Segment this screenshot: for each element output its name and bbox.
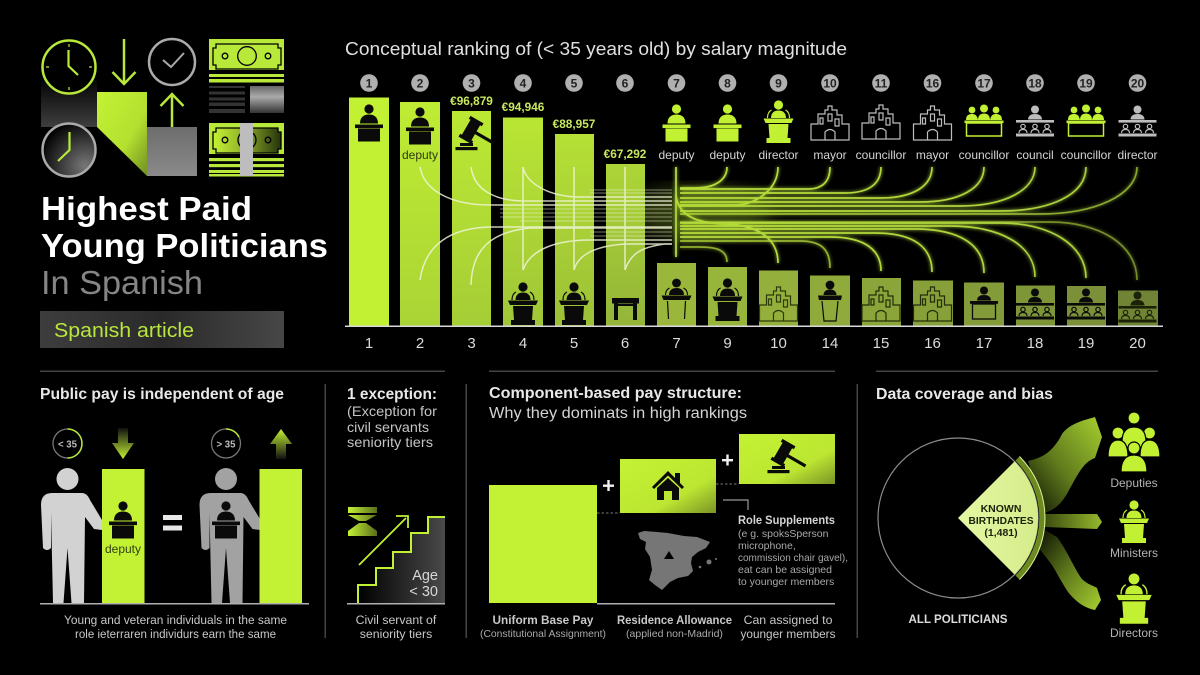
icon: council 20 <box>1118 106 1156 136</box>
known birthdates wedge: BIRTHDATES <box>968 515 1034 527</box>
icon: council 19 <box>1067 288 1105 320</box>
captions: Can assigned to <box>744 613 833 627</box>
icon: desk 17 <box>970 286 998 319</box>
grey block <box>147 127 197 176</box>
axis numbers: 20 <box>1129 335 1146 352</box>
axis numbers: 6 <box>621 335 629 352</box>
title: Young Politicians <box>41 227 328 264</box>
rank badges: 4 <box>520 76 527 90</box>
equals sign <box>163 515 182 530</box>
icon: hourglass <box>348 507 377 536</box>
heading <box>489 385 747 422</box>
panel: component-based pay structure <box>480 385 848 641</box>
captions: Uniform Base Pay <box>493 613 594 627</box>
rank badges: 16 <box>926 76 939 90</box>
captions: (Constitutional Assignment) <box>480 628 606 640</box>
text lines block <box>209 86 245 113</box>
icon: arrow down <box>112 39 136 84</box>
icon: map of Spain <box>638 531 717 590</box>
icon: council 18 <box>1016 106 1054 136</box>
pay bar veteran <box>260 469 302 603</box>
axis numbers: 7 <box>672 335 681 352</box>
title: Highest Paid <box>41 190 252 227</box>
rank badges: 1 <box>366 76 373 90</box>
caption: role ieterraren individurs earn the same <box>75 627 276 641</box>
heading: 1 exception: <box>347 386 437 403</box>
caption <box>356 613 437 641</box>
role labels: councillor <box>1061 148 1111 162</box>
known birthdates wedge <box>958 456 1045 580</box>
icon: ministers lectern <box>1119 500 1149 543</box>
person veteran <box>200 468 260 603</box>
icon: podium on veteran <box>212 501 240 538</box>
icon: lectern 14 <box>818 281 842 321</box>
axis numbers <box>365 335 1146 352</box>
pay bar young <box>102 469 144 603</box>
grey photo block <box>250 86 284 113</box>
icon: gavel on bar 3 <box>456 116 500 153</box>
role supplements text: (e g. spoksSperson <box>738 528 829 540</box>
icon: podium dark on bar 2 <box>406 107 434 144</box>
title: In Spanish <box>41 264 203 301</box>
caption <box>64 613 287 641</box>
salary values: €94,946 <box>502 100 545 114</box>
axis numbers: 15 <box>873 335 889 352</box>
icon: city 16 <box>914 287 952 321</box>
axis numbers: 10 <box>770 335 787 352</box>
rank badges: 11 <box>875 76 888 90</box>
role labels: councillor <box>856 148 906 162</box>
role labels: deputy <box>709 148 746 162</box>
description: (Exception for <box>347 404 437 419</box>
title <box>41 190 328 301</box>
icon: city 11 <box>862 105 900 139</box>
axis numbers: 18 <box>1027 335 1043 352</box>
under 35 badge <box>53 429 82 458</box>
captions: (applied non-Madrid) <box>626 628 723 640</box>
icon: podium dark on bar 1 <box>355 104 383 142</box>
axis numbers: 5 <box>570 335 578 352</box>
heading: Component-based pay structure: <box>489 385 742 402</box>
supplements block <box>739 434 835 484</box>
rank badges: 7 <box>673 76 680 90</box>
rank badges: 19 <box>1079 76 1093 90</box>
axis numbers: 14 <box>822 335 838 352</box>
under 35 badge: < 35 <box>58 438 77 450</box>
rank badges: 2 <box>417 76 424 90</box>
icon: arrow up <box>160 94 184 127</box>
header icon cluster <box>41 39 284 176</box>
icon: council 18 <box>1016 288 1054 320</box>
description: civil servants <box>347 420 429 435</box>
salary values <box>450 94 647 161</box>
icon: desk group 19 <box>1066 104 1106 136</box>
all politicians circle <box>878 438 1038 598</box>
role labels <box>402 148 1158 162</box>
known birthdates wedge: KNOWN <box>981 503 1021 515</box>
role labels: council <box>1016 148 1054 162</box>
known birthdates wedge: (1,481) <box>984 527 1018 539</box>
rank badges: 5 <box>571 76 578 90</box>
axis numbers: 17 <box>976 335 992 352</box>
icon: city 10 <box>760 287 798 321</box>
icon: directors lectern <box>1116 573 1152 624</box>
icon: city 16 <box>914 106 952 140</box>
label: directors: Directors <box>1110 626 1158 640</box>
axis numbers: 3 <box>467 335 476 352</box>
icon: lectern 5 <box>559 282 589 325</box>
rank badges: 6 <box>622 76 629 90</box>
icon: lectern outline 7 <box>662 279 692 319</box>
role icons above bars <box>355 100 1156 153</box>
salary values: €67,292 <box>604 147 647 161</box>
base pay block <box>489 485 597 603</box>
rank badges <box>360 74 1146 92</box>
panel: data coverage and bias <box>876 386 1160 640</box>
axis numbers: 16 <box>924 335 941 352</box>
role labels: director <box>1117 148 1158 162</box>
residence block <box>620 459 716 513</box>
icon: green podium 8 <box>714 104 742 142</box>
role supplements text: to younger members <box>738 576 834 588</box>
icon: check circle <box>149 39 195 85</box>
icon: council 20 <box>1118 292 1156 322</box>
panel: one exception <box>347 386 445 641</box>
bar label: deputy <box>105 542 141 556</box>
stairs chart: Age <box>412 568 438 584</box>
flow to deputies <box>1028 417 1102 513</box>
icon: green lectern 9 <box>764 100 794 143</box>
axis numbers: 9 <box>723 335 732 352</box>
flow to directors <box>1038 529 1101 610</box>
captions: Residence Allowance <box>617 613 732 627</box>
role labels: deputy <box>402 148 438 162</box>
icon: desk group 17 <box>964 104 1004 136</box>
stairs chart: < 30 <box>409 584 438 600</box>
panel: public pay is independent of age <box>40 386 302 641</box>
caption: Civil servant of <box>356 613 437 627</box>
label: all politicians: ALL POLITICIANS <box>908 612 1008 626</box>
label: deputies: Deputies <box>1110 476 1158 490</box>
salary values: €96,879 <box>450 94 493 108</box>
rank badges: 9 <box>775 76 782 90</box>
icon: podium <box>109 501 137 538</box>
icon: banknote <box>209 39 284 82</box>
chart heading: Conceptual ranking of (< 35 years old) by salary magnitude <box>345 39 847 59</box>
caption: Young and veteran individuals in the same <box>64 613 287 627</box>
heading: Public pay is independent of age <box>40 386 284 403</box>
axis numbers: 19 <box>1078 335 1094 352</box>
rank badges: 8 <box>724 76 731 90</box>
role supplements text: eat can be assigned <box>738 564 832 576</box>
role icons inside bars <box>508 278 1156 325</box>
heading: Why they dominats in high rankings <box>489 405 747 422</box>
role labels: mayor <box>916 148 949 162</box>
over 35 badge <box>212 429 240 458</box>
icon: arrow up <box>270 429 292 459</box>
rank badges: 3 <box>468 76 475 90</box>
role supplements text <box>738 513 848 588</box>
person young <box>41 468 102 603</box>
article tag: Spanish article <box>54 320 194 342</box>
rank badges: 18 <box>1028 76 1042 90</box>
icon: lectern 4 <box>508 282 538 325</box>
icon: lectern solid 9 <box>712 278 742 321</box>
heading: Data coverage and bias <box>876 386 1053 403</box>
role supplements text: microphone, <box>738 540 796 552</box>
flow lines: left side <box>420 167 672 285</box>
bar chart <box>349 98 1158 326</box>
icon: deputies group <box>1108 412 1160 472</box>
icon: grey clock <box>42 124 96 176</box>
flow lines: right side <box>676 167 1137 280</box>
description: seniority tiers <box>347 435 433 450</box>
plus signs <box>603 454 733 491</box>
over 35 badge: > 35 <box>216 438 236 450</box>
rank badges: 20 <box>1131 76 1144 90</box>
salary values: €88,957 <box>553 117 596 131</box>
article tag <box>40 311 284 348</box>
rank badges: 10 <box>823 76 837 90</box>
label: ministers: Ministers <box>1110 546 1158 560</box>
icon: arrow down <box>112 428 134 459</box>
captions: younger members <box>740 627 836 641</box>
stairs chart <box>358 516 445 603</box>
role labels: mayor <box>813 148 847 162</box>
icon: green clock <box>42 40 96 94</box>
captions <box>480 613 836 641</box>
rank badges: 17 <box>977 76 991 90</box>
callout connector <box>723 500 748 510</box>
role labels: deputy <box>658 148 695 162</box>
fading grey block <box>41 80 97 127</box>
role labels: councillor <box>959 148 1009 162</box>
description <box>347 404 437 450</box>
role labels: director <box>758 148 799 162</box>
axis numbers: 4 <box>519 335 527 352</box>
role supplements text: Role Supplements <box>738 513 835 527</box>
icon: banded banknotes <box>209 123 284 176</box>
flow to ministers <box>1045 514 1102 529</box>
green descending block <box>97 92 147 176</box>
icon: green podium 7 <box>662 104 690 142</box>
caption: seniority tiers <box>360 627 432 641</box>
icon: city 15 <box>862 287 900 321</box>
icon: table 6 <box>612 298 639 320</box>
axis numbers: 2 <box>416 335 424 352</box>
axis line <box>345 326 1163 327</box>
role supplements text: commission chair gavel), <box>738 552 848 564</box>
axis numbers: 1 <box>365 335 373 352</box>
icon: city 10 <box>811 106 849 140</box>
flow glow <box>630 186 770 238</box>
